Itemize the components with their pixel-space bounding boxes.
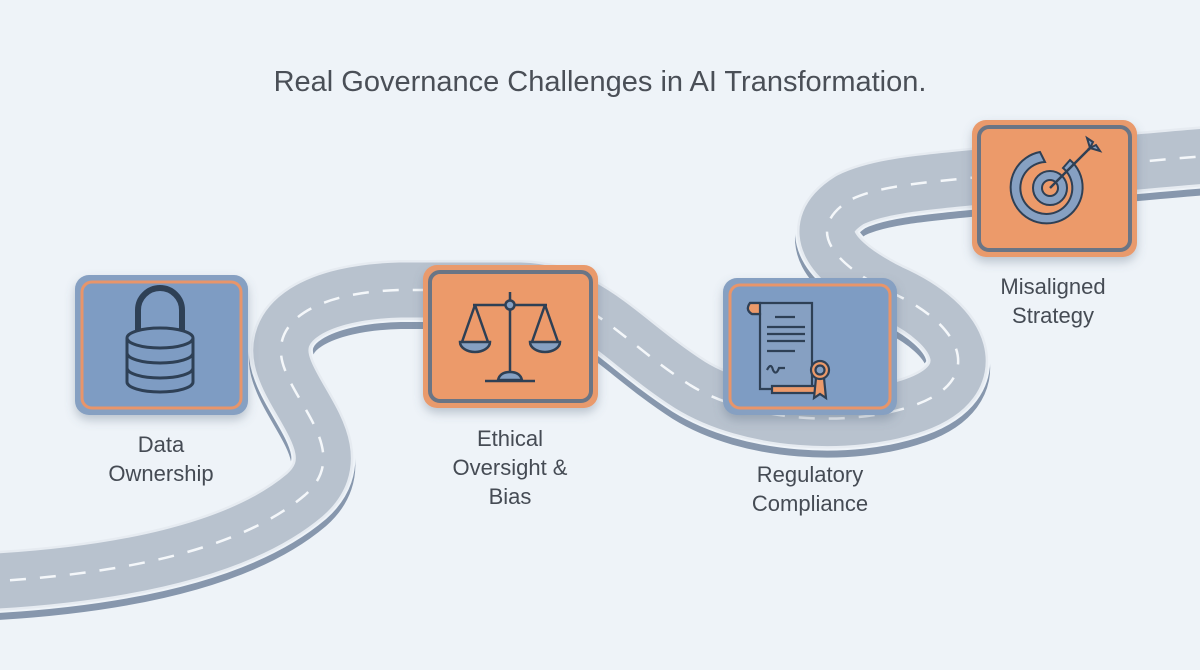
label: ethical oversight: Bias: [489, 484, 531, 509]
label: ethical oversight: Ethical: [477, 426, 543, 451]
label: regulatory compliance: [752, 462, 868, 516]
panel: ethical icon box: [423, 265, 598, 408]
road: [0, 155, 1200, 589]
title: Real Governance Challenges in AI Transformation.: [274, 66, 926, 98]
panel: misaligned icon box: [972, 120, 1137, 257]
label: data ownership: [108, 432, 214, 486]
label: misaligned strategy: Strategy: [1012, 303, 1094, 328]
icon: scales: [460, 292, 560, 381]
label: ethical oversight: [453, 426, 568, 509]
label: misaligned strategy: Misaligned: [1000, 274, 1106, 299]
panel: data ownership icon box: [75, 275, 248, 415]
icon: lock database: [127, 288, 193, 392]
label: data ownership: Ownership: [108, 461, 214, 486]
label: misaligned strategy: [1000, 274, 1106, 328]
label: regulatory compliance: Compliance: [752, 491, 868, 516]
label: data ownership: Data: [138, 432, 184, 457]
label: regulatory compliance: Regulatory: [757, 462, 863, 487]
icon: broken target: [1011, 138, 1100, 223]
panel: regulatory icon box: [723, 278, 897, 415]
icon: certificate: [748, 303, 829, 398]
label: ethical oversight: Oversight &: [453, 455, 567, 480]
